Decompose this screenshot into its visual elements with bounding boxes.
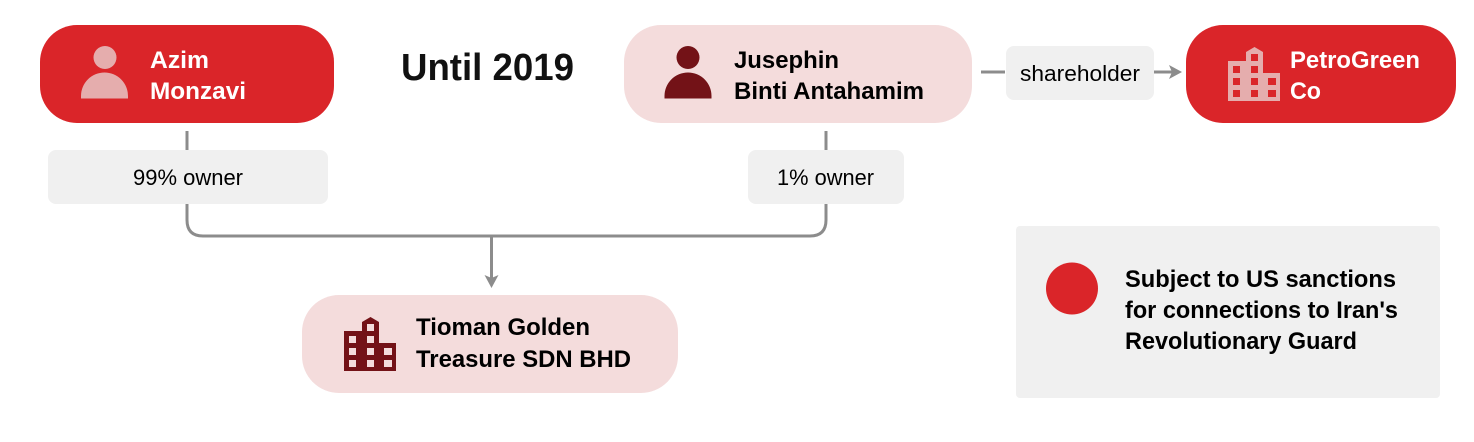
name: Tioman Golden Treasure SDN BHD	[416, 314, 631, 373]
name: Jusephin Binti Antahamim: Jusephin	[734, 47, 839, 74]
icon: building	[344, 317, 396, 371]
node: Jusephin Binti Antahamim	[624, 25, 972, 123]
name: Jusephin Binti Antahamim	[734, 47, 924, 105]
title: Until 2019	[401, 47, 574, 89]
legend marker: red circle	[1046, 262, 1098, 314]
node: Tioman Golden Treasure SDN BHD	[302, 295, 678, 393]
node: PetroGreen Co	[1186, 25, 1456, 123]
name: PetroGreen Co	[1290, 47, 1420, 105]
icon: person	[81, 46, 128, 98]
node: Azim Monzavi	[40, 25, 334, 123]
label: 1% owner: 1% owner	[777, 165, 874, 190]
arrow: shareholder to PetroGreen	[1154, 65, 1182, 79]
name: Azim Monzavi: Azim	[150, 47, 209, 74]
name: PetroGreen Co: Co	[1290, 78, 1321, 105]
icon: person	[664, 46, 712, 98]
connector: owners to Tioman Golden Treasure	[187, 131, 826, 288]
icon: building	[1228, 47, 1280, 101]
legend text: for connections to Iran's	[1125, 297, 1398, 324]
name: Azim Monzavi	[150, 47, 246, 105]
label: shareholder: shareholder	[1020, 61, 1140, 86]
legend panel	[1016, 226, 1440, 398]
label: 99% owner	[48, 150, 328, 204]
connector: Jusephin to shareholder label	[981, 70, 1005, 74]
name: Azim Monzavi: Monzavi	[150, 78, 246, 105]
label: 1% owner	[748, 150, 904, 204]
legend text: Subject to US sanctions	[1125, 266, 1396, 293]
name: Jusephin Binti Antahamim: Binti Antahamim	[734, 78, 924, 105]
name: Tioman Golden Treasure SDN BHD: Tioman Golden	[416, 314, 590, 341]
legend text	[1125, 266, 1398, 355]
name: Tioman Golden Treasure SDN BHD: Treasure SDN BHD	[416, 346, 631, 373]
label: 99% owner: 99% owner	[133, 165, 243, 190]
label: shareholder	[1006, 46, 1154, 100]
legend text: Revolutionary Guard	[1125, 328, 1357, 355]
name: PetroGreen Co: PetroGreen	[1290, 47, 1420, 74]
